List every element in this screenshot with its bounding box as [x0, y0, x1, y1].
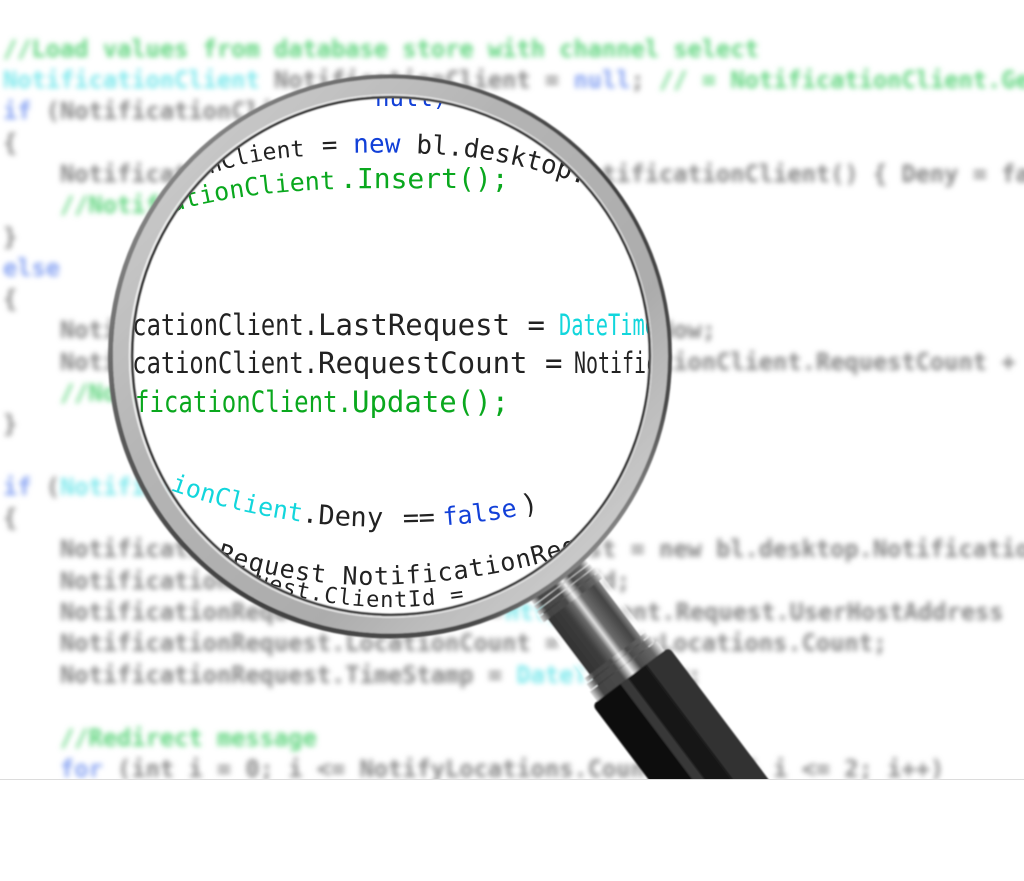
background: blurred source code: {: [3, 285, 17, 313]
background: blurred source code: else: [3, 254, 60, 282]
magnified deny condition: ionClient.Deny ==false): [172, 474, 532, 532]
lens: white glass: [131, 96, 651, 616]
background: blurred source code: if (NotificationClient == null): [3, 97, 445, 125]
background: blurred source code: for (int i = 0; i <= NotifyLocations.Count - 1 && i <= 2; i++): [60, 755, 944, 783]
magnified null keyword: null): [375, 84, 447, 112]
lens: magnified code: [134, 98, 649, 608]
magnifier ring: [110, 77, 670, 636]
black grip: [593, 648, 770, 779]
magnified update call: [137, 390, 502, 418]
background: blurred source code: Http: [505, 598, 562, 626]
magnified request count line: RequestCount =: [318, 346, 562, 380]
magnified insert target: ationClient: [178, 172, 333, 211]
magnified last request line: icationClient.: [118, 308, 318, 342]
magnified request count line: Notific: [574, 346, 658, 380]
magnified update call: Update();: [352, 385, 509, 419]
background: blurred source code: }: [3, 223, 17, 251]
magnifier handle: [531, 560, 770, 779]
background: blurred source code: //NotificationClient.Insert();: [60, 191, 488, 219]
glass sleeve around neck: [536, 569, 655, 691]
magnified last request line: [134, 312, 648, 341]
magnified last request line: DateTime: [559, 308, 657, 342]
background: blurred source code: rrent.Request.UserHostAddress: [590, 598, 1004, 626]
magnified update call: ficationClient.: [135, 385, 352, 419]
magnified client name: nClient: [211, 140, 303, 174]
footer band rule: [0, 779, 1024, 780]
magnified client id line: uest.ClientId =: [258, 575, 463, 608]
magnified insert call: .Insert();: [340, 162, 509, 195]
background: blurred source code: {: [3, 504, 17, 532]
background: blurred source code: //Redirect message: [60, 724, 317, 752]
magnified last request line: LastRequest =: [318, 308, 545, 342]
background: blurred source code: {: [3, 129, 17, 157]
magnified request count line: icationClient.: [118, 346, 318, 380]
neck collars: [531, 560, 666, 702]
magnified new expression: = new bl.desktop.: [322, 134, 580, 183]
background: blurred source code: }: [3, 410, 17, 438]
background: blurred source code: NotificationRequest.ClientId = ClientId;: [60, 567, 630, 595]
background: blurred source code: NotificationRequest.LocationCount = NotifyLocations.Count;: [60, 629, 887, 657]
background: blurred source code: NotificationRequest.IPAddress =: [60, 598, 516, 626]
background: blurred source code: if (NotificationClient.Deny == false): [3, 473, 531, 501]
background: blurred source code: NotificationRequest.TimeStamp = DateTime.Now;: [60, 661, 702, 689]
background: blurred source code: NotificationClient.LastRequest = DateTime.Now;: [60, 316, 716, 344]
handle neck: [542, 574, 654, 692]
background: blurred source code: //NotificationClient.Update();: [60, 379, 488, 407]
background: blurred source code: //Load values from database store with channel select: [3, 35, 759, 63]
magnified request count line: [134, 350, 649, 379]
